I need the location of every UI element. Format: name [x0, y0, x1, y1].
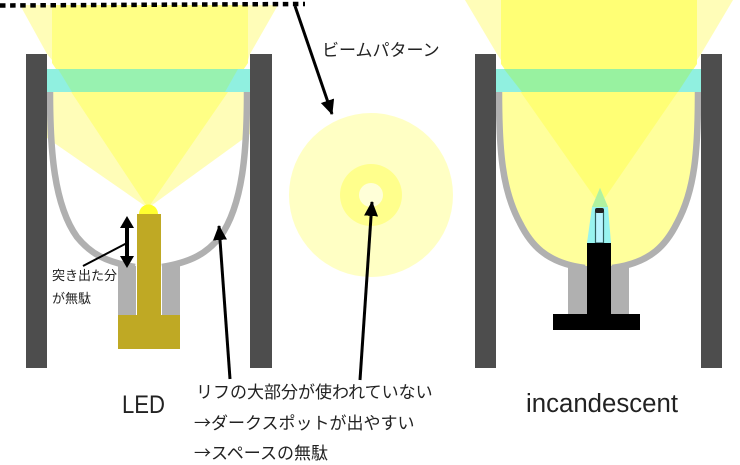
leader line to note	[83, 243, 127, 266]
explanation text: →ダークスポットが出やすい	[194, 409, 414, 434]
LED lens band	[47, 69, 250, 92]
arrow: to beam pattern	[295, 6, 332, 114]
arrow: to reflector	[219, 226, 230, 379]
LED housing walls	[26, 54, 272, 368]
beam pattern circles	[289, 113, 453, 277]
LED reflector	[50, 92, 247, 316]
explanation text	[194, 382, 433, 464]
incandescent housing walls	[475, 54, 722, 368]
explanation text: リフの大部分が使われていない	[196, 382, 433, 402]
double arrow: protruding length	[120, 216, 134, 268]
note: protruding part wasted: 突き出た分	[52, 268, 117, 283]
incandescent lens band	[496, 69, 701, 92]
label: incandescent: incandescent	[526, 390, 678, 418]
label: beam pattern: ビームパターン	[322, 41, 440, 60]
LED light beams	[20, 5, 278, 214]
incandescent bulb	[553, 188, 640, 330]
LED emitter	[118, 214, 180, 349]
note: protruding part wasted	[52, 268, 117, 306]
incandescent reflector	[499, 92, 698, 316]
label: LED: LED	[122, 391, 165, 419]
incandescent light beams	[465, 0, 733, 268]
dotted beam target line	[0, 4, 305, 6]
note: protruding part wasted: が無駄	[52, 291, 91, 306]
explanation text: →スペースの無駄	[194, 439, 328, 464]
arrow: to dark spot	[360, 202, 372, 380]
